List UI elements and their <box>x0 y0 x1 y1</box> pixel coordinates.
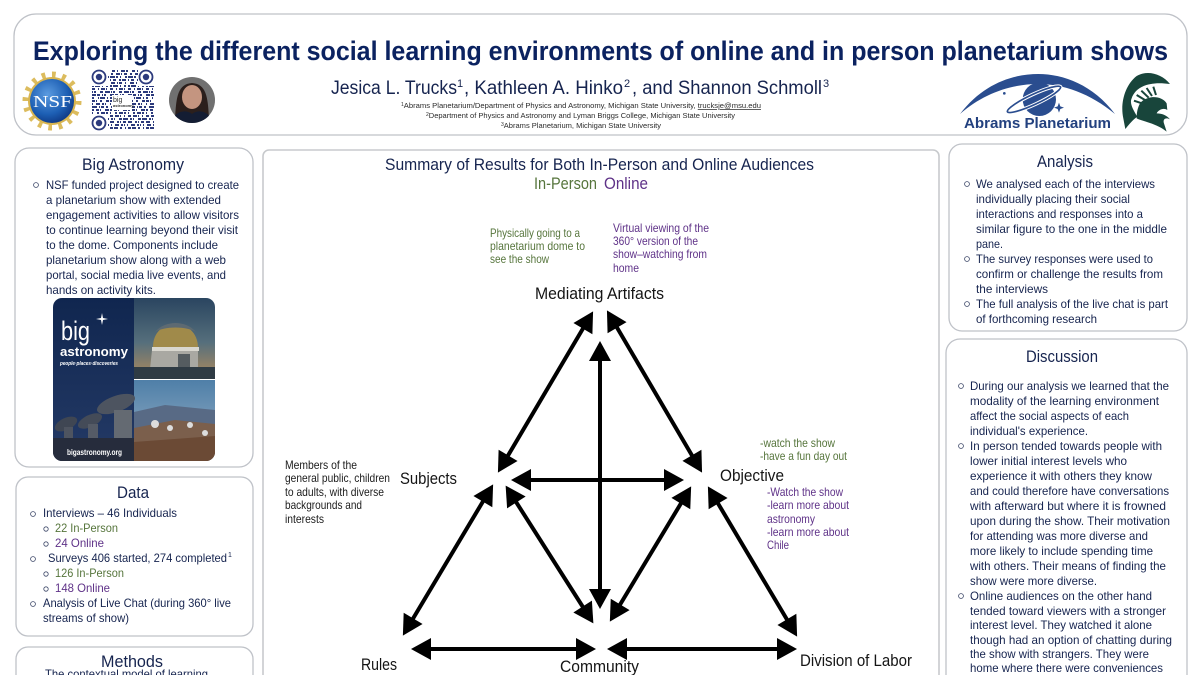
list: analysis steps: individually placing their social <box>976 192 1130 206</box>
list: discussion points: interest level. They watched it alone <box>970 618 1152 632</box>
text: mediating artifacts in-person: planetarium dome to <box>490 239 585 253</box>
list: data sources: Analysis of Live Chat (during 360° live <box>43 596 231 610</box>
list: discussion points: more likely to include spending time <box>970 544 1153 558</box>
list: discussion points: affect the social aspects of each <box>970 409 1129 423</box>
list: analysis steps: confirm or challenge the results from <box>976 267 1163 281</box>
text: subjects description: to adults, with diverse <box>285 485 384 499</box>
image: big astronomy card: people·places·discoveries <box>59 361 118 367</box>
text: Big Astronomy description: to the dome. Components include <box>46 238 218 252</box>
label: objective: Objective <box>720 467 784 485</box>
affiliations: 2 <box>426 112 429 118</box>
list: discussion points: experience it with others they know <box>970 469 1152 483</box>
list: discussion points: lower initial interest levels who <box>970 454 1127 468</box>
list: data sources: 148 Online <box>55 581 110 595</box>
list: data sources: Interviews – 46 Individuals <box>43 506 177 520</box>
authors: , and Shannon Schmoll <box>632 78 822 99</box>
list: discussion points: show were more diverse. <box>970 574 1097 588</box>
affiliations: Department of Physics and Astronomy and Lyman Briggs College, Michigan State University <box>429 111 735 120</box>
list: discussion points <box>959 379 1172 675</box>
affiliations <box>401 101 761 130</box>
list: data sources: 24 Online <box>55 536 104 550</box>
authors: Jesica L. Trucks <box>331 78 457 99</box>
label: division of labor: Division of Labor <box>800 652 912 670</box>
list: discussion points: In person tended towards people with <box>970 439 1162 453</box>
text: mediating artifacts online: show–watching from <box>613 247 707 261</box>
legend: in-person and online: Online <box>604 175 648 193</box>
list: data sources: streams of show) <box>43 611 129 625</box>
text: objective online: Chile <box>767 538 789 552</box>
text: objective in-person: -have a fun day out <box>760 449 848 463</box>
authors: , Kathleen A. Hinko <box>464 78 623 99</box>
text: objective online: -learn more about <box>767 498 850 512</box>
list: discussion points: During our analysis we learned that the <box>970 379 1169 393</box>
text: objective online: astronomy <box>767 512 815 526</box>
image: big astronomy card: bigastronomy.org <box>67 448 122 457</box>
icon: QR code: astronomy <box>113 103 134 108</box>
text: mediating artifacts online: Virtual viewing of the <box>613 221 709 235</box>
panel: Data <box>16 477 253 636</box>
image: big astronomy card: astronomy <box>60 344 129 359</box>
text: Big Astronomy description: planetarium show along with a web <box>46 253 226 267</box>
text: mediating artifacts online: home <box>613 261 639 275</box>
heading: Discussion: Discussion <box>1026 348 1098 366</box>
text: Big Astronomy description: hands on activity kits. <box>46 283 156 297</box>
text: mediating artifacts in-person: Physically going to a <box>490 226 580 240</box>
diagram: activity system triangle <box>408 319 792 649</box>
affiliations: trucksje@msu.edu <box>698 101 761 110</box>
affiliations: Abrams Planetarium/Department of Physics and Astronomy, Michigan State University, <box>404 101 698 110</box>
panel: Discussion <box>946 339 1187 675</box>
list: analysis steps: similar figure to the one in the middle <box>976 222 1167 236</box>
icon: QR code: big <box>113 97 122 104</box>
list: discussion points: tended toward viewers with a stronger <box>970 604 1166 618</box>
label: mediating artifacts: Mediating Artifacts <box>535 285 664 303</box>
authors: 1 <box>457 78 463 90</box>
icon: author photo <box>168 76 216 124</box>
text: Big Astronomy description <box>34 178 239 297</box>
list: analysis steps: We analysed each of the interviews <box>976 177 1155 191</box>
list: discussion points: Online audiences on the other hand <box>970 589 1152 603</box>
panel: Methods <box>16 647 253 675</box>
text: subjects description <box>285 458 390 526</box>
list: data sources: 126 In-Person <box>55 566 124 580</box>
list: analysis steps: the interviews <box>976 282 1048 296</box>
heading: Methods: Methods <box>101 653 163 671</box>
text: mediating artifacts online <box>613 221 709 275</box>
list: analysis steps: The full analysis of the live chat is part <box>976 297 1169 311</box>
text: Big Astronomy description: engagement activities to allow visitors <box>46 208 239 222</box>
authors: 2 <box>624 78 630 90</box>
panel: header <box>14 14 1187 135</box>
text: objective in-person <box>760 436 848 463</box>
image: big astronomy card: big <box>61 316 90 346</box>
panel: Big Astronomy <box>15 148 253 467</box>
panel: Analysis <box>949 144 1187 331</box>
panel: summary of results <box>263 150 939 675</box>
list: discussion points: with others. Their means of finding the <box>969 559 1166 573</box>
list: data sources: 1 <box>228 552 232 559</box>
list: discussion points: though had an option of chatting during <box>970 633 1172 647</box>
list: data sources: 22 In-Person <box>55 521 118 535</box>
heading: Data: Data <box>117 484 150 502</box>
image: big astronomy card <box>53 298 215 461</box>
text: objective online: -Watch the show <box>767 485 843 499</box>
icon: Abrams Planetarium logo <box>960 74 1115 132</box>
affiliations: Abrams Planetarium, Michigan State University <box>504 121 661 130</box>
text: Big Astronomy description: a planetarium show with extended <box>46 193 221 207</box>
list: data sources <box>31 506 232 625</box>
list: analysis steps: pane. <box>976 237 1003 251</box>
affiliations: 3 <box>501 122 504 128</box>
icon: QR code <box>91 69 155 132</box>
heading: Analysis: Analysis <box>1037 153 1093 171</box>
list: analysis steps <box>965 177 1169 326</box>
authors: 3 <box>823 78 829 90</box>
text: mediating artifacts in-person: see the show <box>490 252 549 266</box>
list: discussion points: modality of the learning environment <box>970 394 1160 408</box>
text: subjects description: general public, children <box>285 471 390 485</box>
text: mediating artifacts online: 360° version of the <box>613 234 698 248</box>
list: analysis steps: The survey responses were used to <box>976 252 1153 266</box>
text: objective online <box>767 485 850 552</box>
label: subjects: Subjects <box>400 470 457 488</box>
list: discussion points: home where there were conveniences <box>970 661 1163 675</box>
text: Big Astronomy description: portal, social media live events, and <box>46 268 226 282</box>
text: objective in-person: -watch the show <box>760 436 835 450</box>
list: discussion points: with afterward but where it is frowned <box>969 499 1166 513</box>
list: discussion points: individual's experience. <box>970 424 1088 438</box>
text: objective online: -learn more about <box>767 525 850 539</box>
legend: in-person and online: In-Person <box>534 175 597 193</box>
list: discussion points: upon during the show. Their motivation <box>970 514 1170 528</box>
heading: summary of results: Summary of Results for Both In-Person and Online Audiences <box>385 156 814 174</box>
legend: in-person and online <box>534 175 648 193</box>
authors <box>331 78 829 99</box>
list: analysis steps: interactions and responses into a <box>976 207 1143 221</box>
text: mediating artifacts in-person <box>490 226 585 266</box>
text: Big Astronomy description: to continue learning beyond their visit <box>46 223 239 237</box>
heading: Big Astronomy: Big Astronomy <box>82 156 185 174</box>
icon: Abrams Planetarium logo: Abrams Planetarium <box>964 115 1111 132</box>
icon: NSF logo: NSF <box>33 92 72 111</box>
list: discussion points: the show with strangers. They were <box>970 647 1149 661</box>
icon: NSF logo <box>27 76 77 126</box>
text: subjects description: Members of the <box>285 458 357 472</box>
text: subjects description: interests <box>285 512 324 526</box>
label: rules: Rules <box>361 656 397 674</box>
list: discussion points: and could therefore have conversations <box>970 484 1169 498</box>
list: analysis steps: of forthcoming research <box>976 312 1097 326</box>
text: subjects description: backgrounds and <box>285 498 362 512</box>
icon: Spartan helmet <box>1122 73 1170 132</box>
list: data sources: Surveys 406 started, 274 completed <box>48 551 227 565</box>
affiliations: 1 <box>401 102 404 108</box>
text: Big Astronomy description: NSF funded project designed to create <box>46 178 239 192</box>
list: discussion points: for attending was more diverse and <box>970 529 1148 543</box>
